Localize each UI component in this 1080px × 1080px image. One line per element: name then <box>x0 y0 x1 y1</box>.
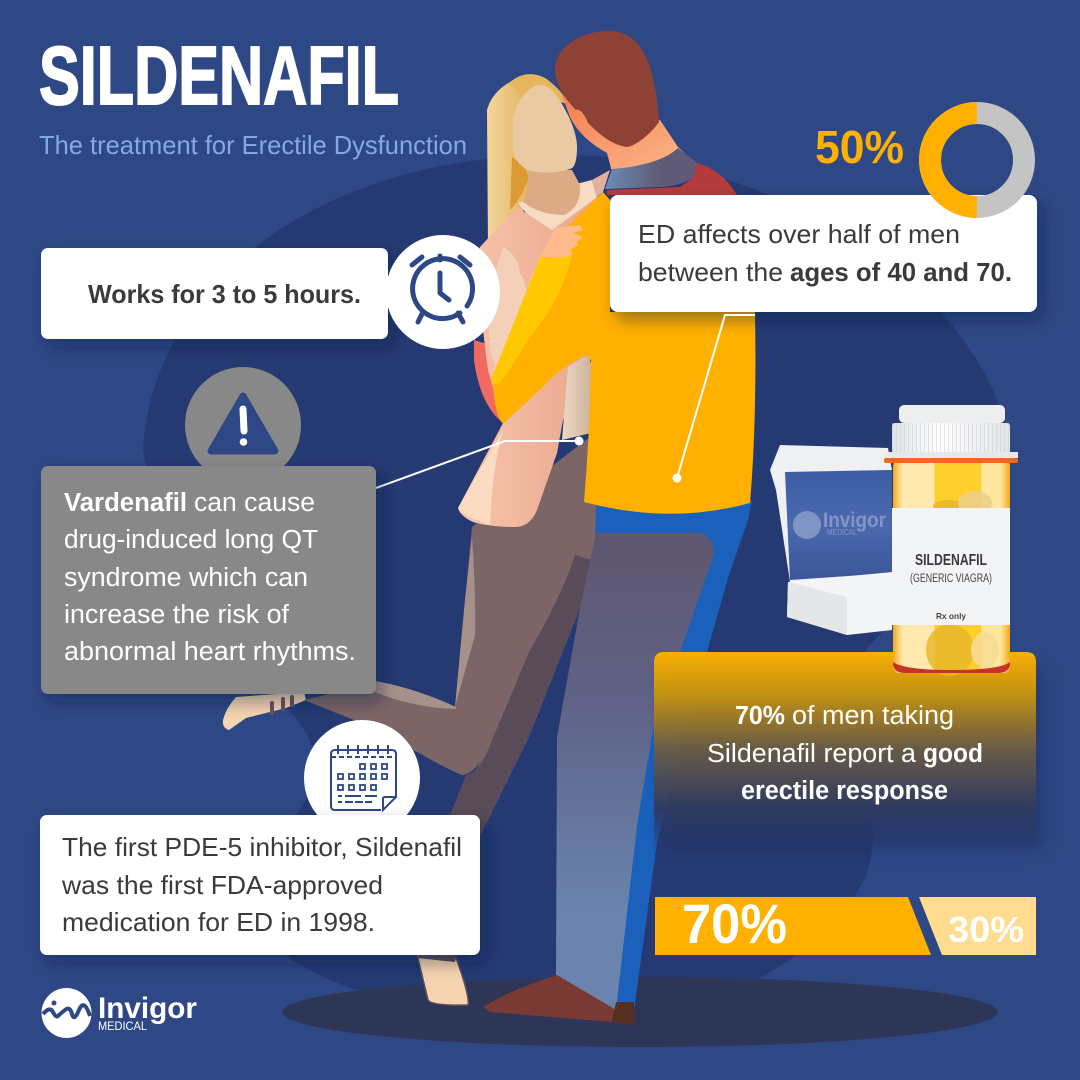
bottle label: Rx only <box>936 611 966 621</box>
card: works for hours <box>41 248 388 339</box>
woman red lining <box>474 340 503 423</box>
card: Vardenafil warning: Vardenafil <box>64 489 187 517</box>
man collar <box>605 148 697 189</box>
card: Vardenafil warning: syndrome which can <box>64 564 308 592</box>
connector line: woman <box>376 436 584 488</box>
card: ED affects <box>610 195 1037 312</box>
panel text: Sildenafil report a <box>707 740 917 768</box>
woman raised foot <box>223 692 306 730</box>
card: ED affects: ages of 40 and 70. <box>790 257 1012 287</box>
50 percent label: 50% <box>815 121 904 173</box>
title: SILDENAFIL <box>39 29 399 122</box>
logo mark <box>42 988 92 1038</box>
pill bottle <box>884 405 1018 676</box>
box lid <box>770 445 892 582</box>
box logo <box>793 509 886 539</box>
bar chart: 70 percent vs 30 percent <box>655 892 1036 955</box>
icon: calendar <box>304 720 420 836</box>
background blob <box>143 155 1005 1020</box>
card: Vardenafil warning: abnormal heart rhythms. <box>64 638 356 666</box>
panel text: good <box>923 740 983 768</box>
woman boot <box>416 950 468 1005</box>
box base <box>787 572 892 635</box>
woman torso <box>458 195 600 527</box>
subtitle: The treatment for Erectile Dysfunction <box>39 130 467 160</box>
icon: warning <box>185 367 301 483</box>
pills <box>926 491 999 676</box>
man sweater <box>493 192 755 514</box>
man hair <box>555 31 659 147</box>
bottle label <box>892 508 1010 625</box>
card: ED affects: between the <box>638 257 783 287</box>
woman face <box>513 85 577 172</box>
card: works for hours: Works for 3 to 5 hours. <box>88 279 361 309</box>
bottle label: (GENERIC VIAGRA) <box>910 573 992 585</box>
woman hair <box>487 74 570 248</box>
panel text: erectile response <box>741 777 948 805</box>
man trousers <box>556 500 752 1012</box>
man sleeve highlight <box>491 250 573 384</box>
gradient panel <box>654 652 1036 848</box>
card: Vardenafil warning: can cause <box>194 489 315 517</box>
box inner blue <box>785 470 892 580</box>
man red shirt <box>607 163 737 195</box>
panel text <box>707 702 983 805</box>
bottle body <box>893 460 1010 673</box>
card: ED affects: ED affects over half of men <box>638 219 960 249</box>
card: first PDE-5 inhibitor <box>40 815 480 955</box>
stat: 50 percent donut <box>610 113 1037 312</box>
woman collar <box>518 170 610 232</box>
logo subtitle: MEDICAL <box>98 1019 147 1033</box>
bottle cap <box>884 405 1018 463</box>
panel: good erectile response <box>654 652 1044 848</box>
woman trousers <box>304 437 600 962</box>
box with logo <box>770 445 892 635</box>
box logo: Invigor <box>823 509 886 532</box>
box logo: MEDICAL <box>827 528 857 537</box>
woman neck <box>523 170 580 215</box>
card: Vardenafil warning <box>41 466 376 694</box>
bar: 30 percent: 30% <box>948 909 1024 950</box>
card: first PDE-5 inhibitor: medication for ED in 1998. <box>62 907 375 937</box>
bar: 70 percent: 70% <box>682 892 787 955</box>
ground shadow <box>282 977 998 1047</box>
card: first PDE-5 inhibitor: was the first FDA-approved <box>61 870 383 900</box>
card: Vardenafil warning: increase the risk of <box>64 601 290 629</box>
card: first PDE-5 inhibitor: The first PDE-5 inhibitor, Sildenafil <box>62 832 462 862</box>
card: Vardenafil warning: drug-induced long QT <box>64 526 318 554</box>
woman hand <box>540 225 583 258</box>
panel shadow <box>664 668 1044 848</box>
woman hip <box>562 355 591 440</box>
man neck <box>562 95 697 172</box>
bottle base rim <box>893 662 1010 673</box>
man shoe <box>483 975 634 1025</box>
panel text: of men taking <box>792 702 954 730</box>
bottle label: SILDENAFIL <box>915 552 987 569</box>
logo wordmark: Invigor <box>98 992 197 1025</box>
bar: 30 percent <box>919 897 1036 955</box>
donut chart <box>930 113 1024 207</box>
logo: Invigor Medical <box>42 988 197 1038</box>
illustration: couple <box>223 31 755 1025</box>
bar: 70 percent <box>655 892 931 955</box>
panel text: 70% <box>735 702 785 730</box>
icon: alarm clock <box>386 235 500 349</box>
connector line: ED <box>672 315 755 482</box>
